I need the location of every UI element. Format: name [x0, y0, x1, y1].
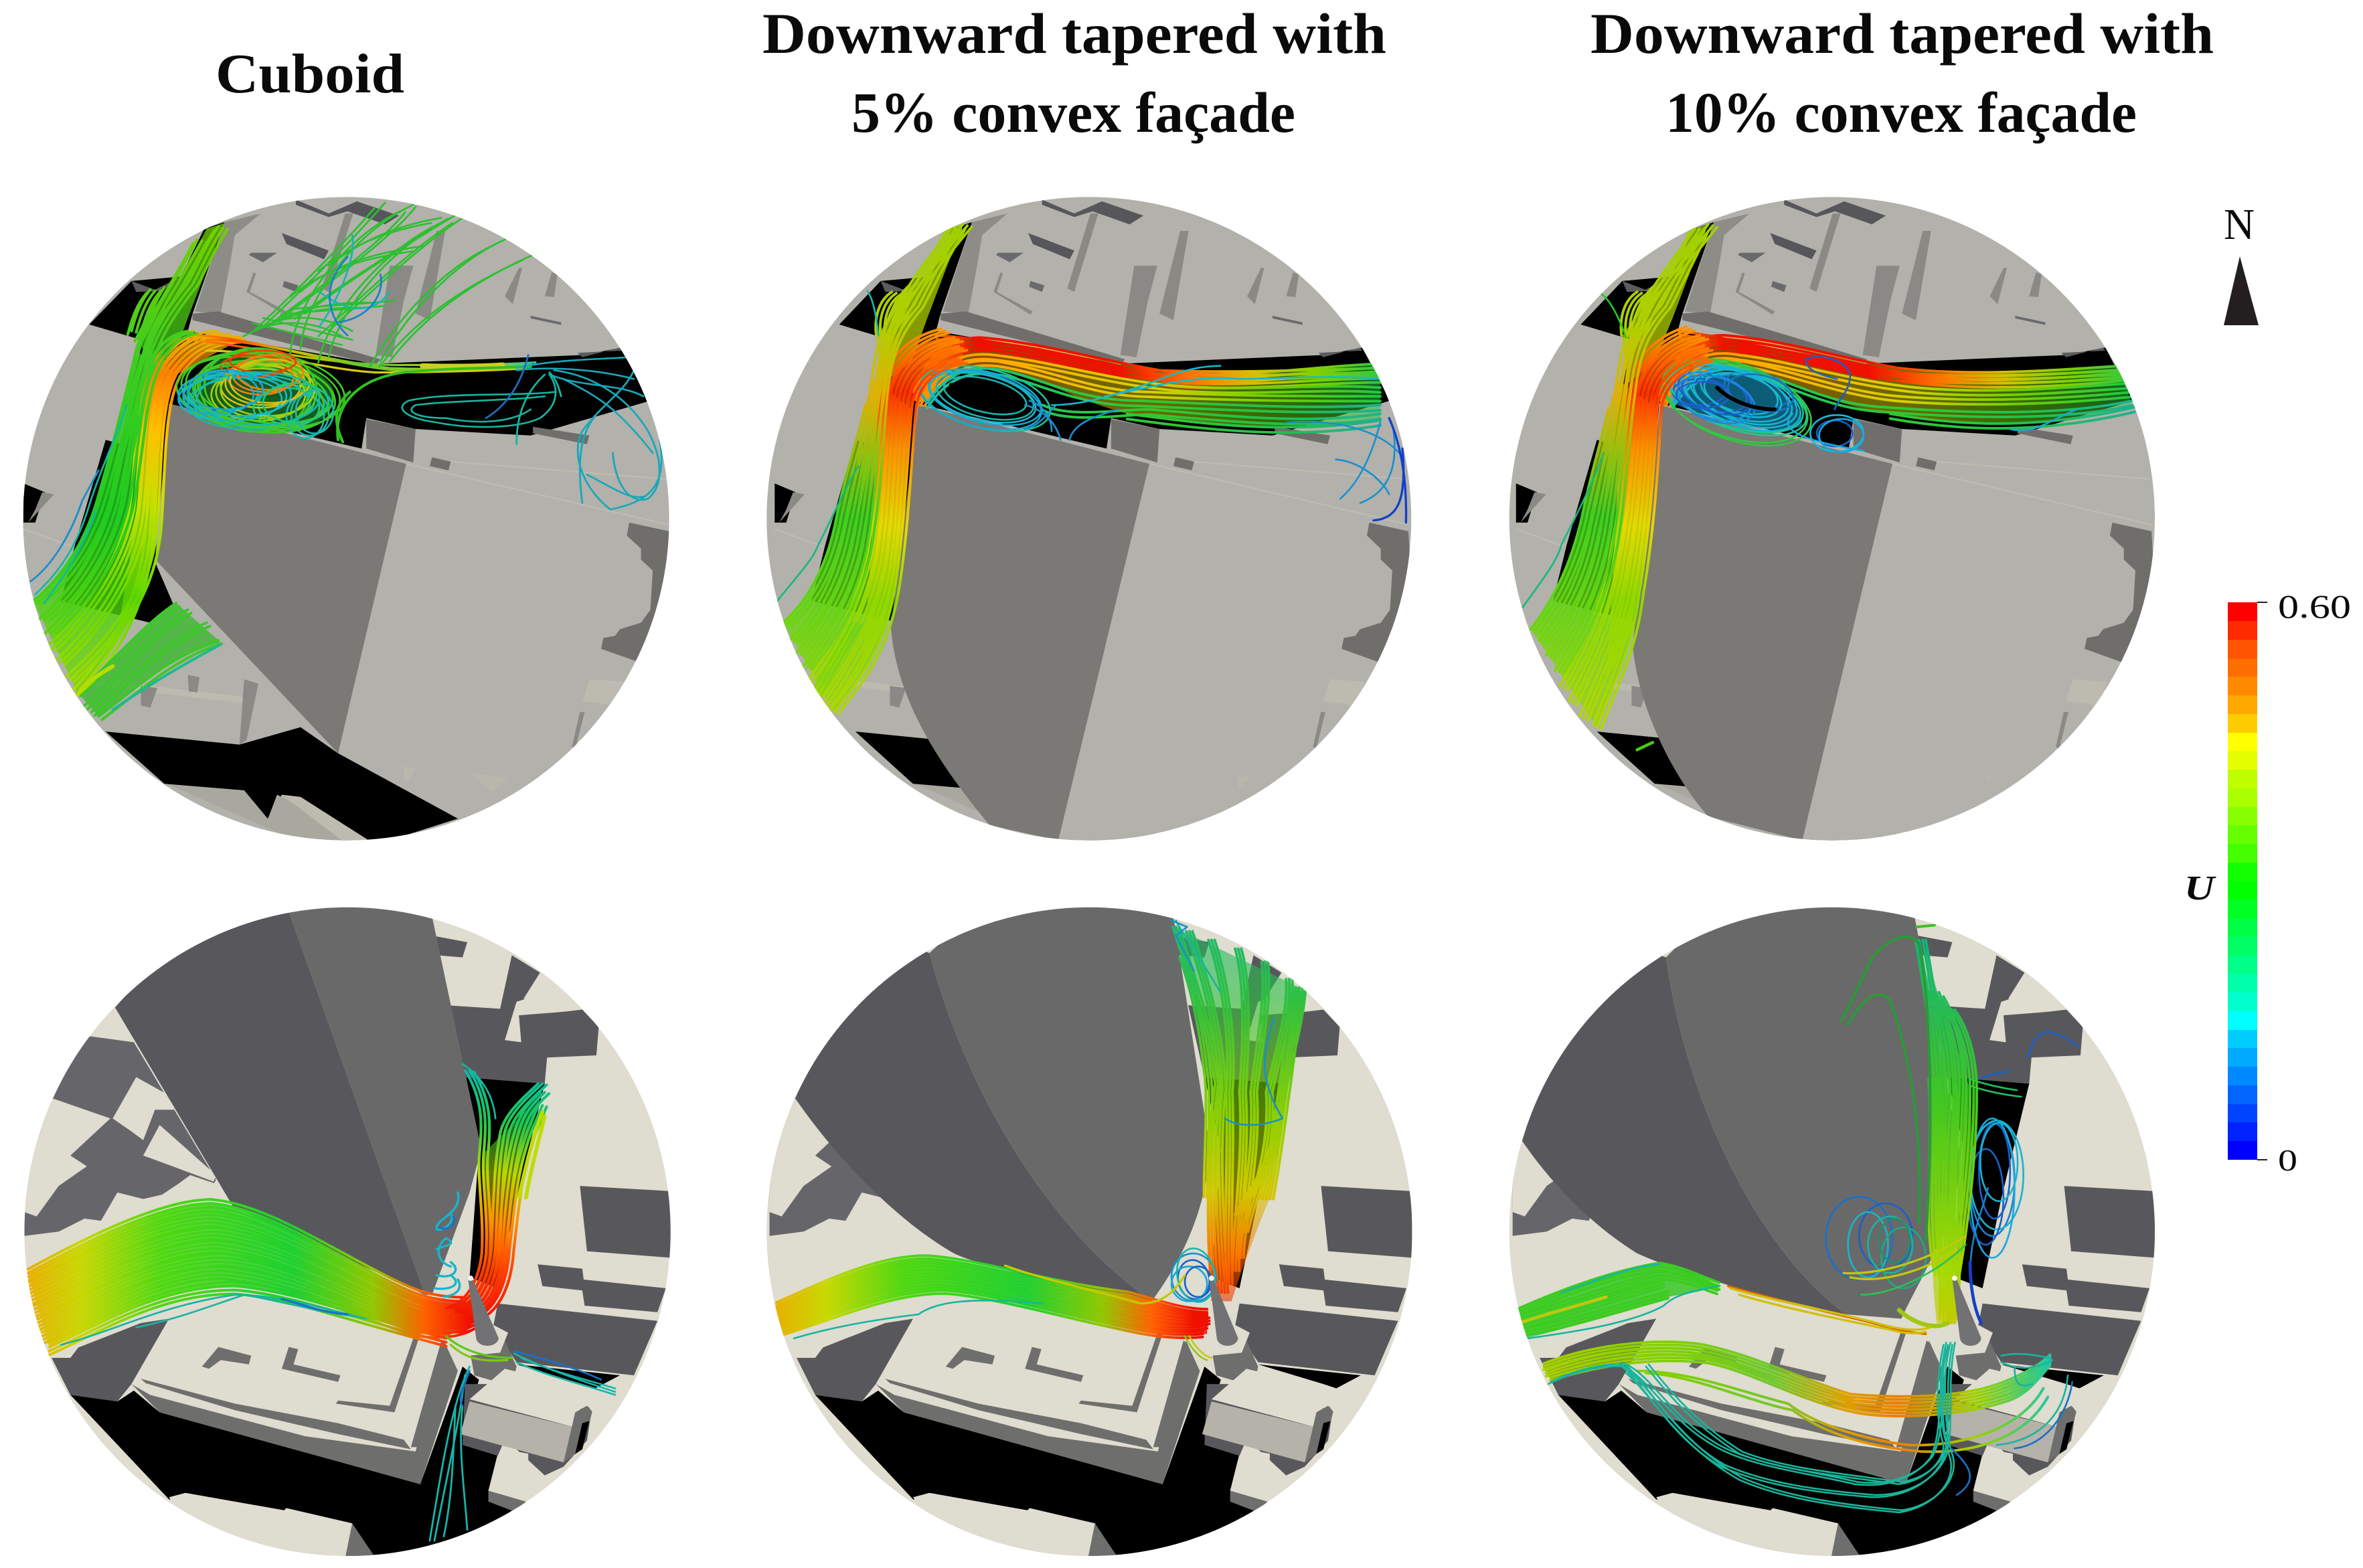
- streamlines: [29, 203, 661, 720]
- tower faces: [1522, 927, 1846, 1314]
- column heading: 5% convex facade: 5% convex façade: [851, 80, 1295, 145]
- tower facade: [157, 404, 406, 754]
- panel: 10% convex facade, south-side view: [1510, 901, 2155, 1563]
- streamlines: [777, 920, 1305, 1360]
- legend title: U: U: [2184, 869, 2216, 907]
- icon: north arrow: [2224, 256, 2259, 325]
- colour legend: velocity scale: [2228, 602, 2267, 1160]
- streamlines: [1522, 224, 2135, 750]
- legend label: minimum: 0: [2278, 1143, 2297, 1177]
- tower faces: [794, 927, 1151, 1301]
- panel: 10% convex facade, north-side view: [1510, 197, 2155, 849]
- column heading: 10% convex facade: [1591, 1, 2214, 145]
- spire: [1952, 1276, 1981, 1346]
- panel: cuboid, north-side view: [23, 197, 671, 845]
- column heading: 5% convex facade: [762, 1, 1386, 145]
- tower faces: [115, 905, 425, 1295]
- column heading: 5% convex facade: Downward tapered with: [762, 1, 1386, 66]
- panel: 5% convex facade, south-side view: [766, 905, 1412, 1563]
- spire: [1209, 1276, 1238, 1346]
- legend label: maximum: 0.60: [2278, 588, 2351, 625]
- streamlines: [28, 1064, 615, 1541]
- tower facade: [1633, 405, 1892, 841]
- tower roof: [1770, 752, 1988, 841]
- panel: 5% convex facade, north-side view: [766, 197, 1411, 849]
- column heading: 10% convex facade: Downward tapered with: [1591, 1, 2214, 66]
- panel: cuboid, south-side view: [24, 905, 671, 1563]
- column heading: Cuboid: Cuboid: [216, 43, 404, 105]
- tower facade: [891, 405, 1149, 841]
- column heading: 10% convex facade: 10% convex façade: [1665, 80, 2137, 145]
- north arrow label: N: [2224, 200, 2255, 249]
- tower roof: [1028, 751, 1238, 841]
- streamlines: [1518, 925, 2079, 1512]
- streamlines: [777, 224, 1406, 713]
- spire: [468, 1276, 499, 1346]
